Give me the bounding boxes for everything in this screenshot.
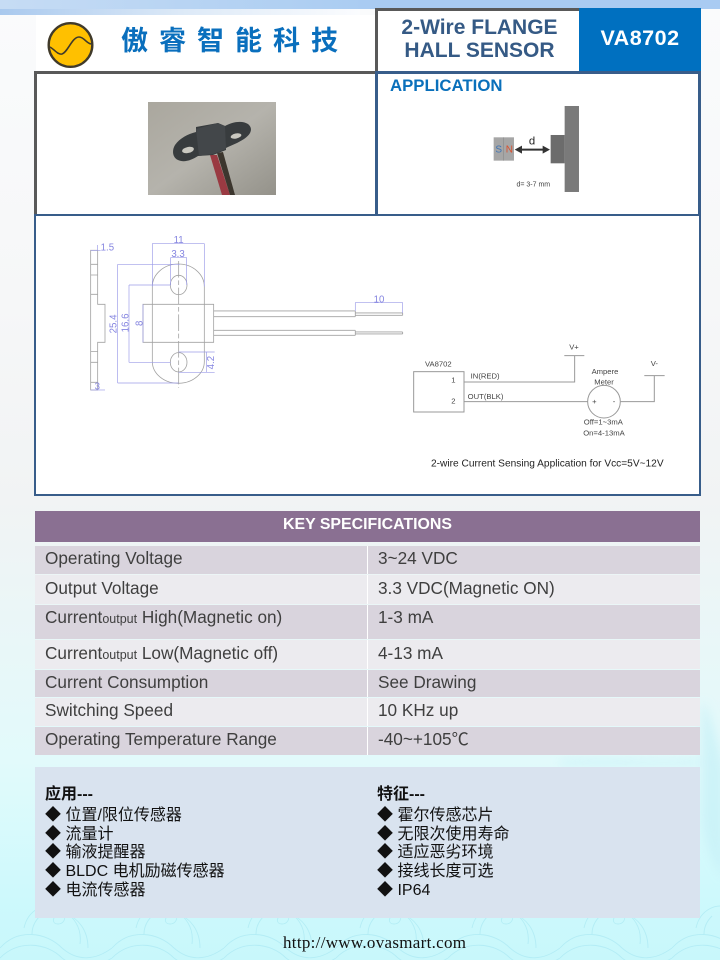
application diagram: magnet and sensor gap (494, 106, 579, 192)
mechanical dimension drawing: 16.6 (121, 314, 132, 332)
applications list: ◆ 电流传感器 (45, 882, 145, 899)
row: current high: 1-3 mA (378, 607, 433, 627)
features list: ◆ 适应恶劣环境 (377, 844, 493, 861)
row: switching speed: 10 KHz up (378, 700, 458, 720)
row: temperature range (35, 727, 700, 755)
specifications table (35, 511, 700, 755)
model number box (579, 8, 701, 72)
circuit diagram: 2-wire Current Sensing Application for Vcc=5V~12V (431, 459, 664, 470)
white content area behind the header and panels (36, 15, 700, 495)
circuit diagram: VA8702 (425, 359, 452, 368)
row: temperature range: -40~+105℃ (378, 729, 469, 749)
application diagram: magnet and sensor gap: d= 3-7 mm (517, 181, 550, 188)
applications list: ◆ 位置/限位传感器 (45, 807, 182, 824)
circuit diagram: Ampere (592, 367, 618, 376)
mechanical dimension drawing: 10 (374, 294, 384, 305)
table header: KEY SPECIFICATIONS (283, 516, 452, 533)
row: temperature range: Operating Temperature Range (45, 729, 277, 749)
website footer: http://www.ovasmart.com (283, 933, 466, 952)
model number box: VA8702 (600, 26, 680, 50)
circuit diagram: Meter (594, 377, 614, 386)
row: current low: 4-13 mA (378, 643, 443, 663)
product title box: HALL SENSOR (404, 39, 555, 62)
circuit diagram: Off=1~3mA (584, 417, 624, 426)
mechanical dimension drawing: 25.4 (109, 314, 120, 333)
row: output voltage: Output Voltage (45, 578, 159, 598)
application diagram: magnet and sensor gap: N (506, 145, 513, 156)
mechanical dimension drawing: 11 (174, 235, 184, 246)
product title box: 2-Wire FLANGE (401, 16, 558, 39)
mechanical dimension drawing: 1.5 (101, 242, 114, 253)
row: output voltage: 3.3 VDC(Magnetic ON) (378, 578, 555, 598)
mechanical dimension drawing: 3 (95, 381, 100, 392)
circuit diagram: V+ (569, 343, 579, 352)
row: current consumption: Current Consumption (45, 672, 208, 692)
row: operating voltage (35, 546, 700, 574)
row: output voltage (35, 575, 700, 604)
features list: 特征--- (377, 786, 425, 803)
applications list: ◆ 输液提醒器 (45, 844, 145, 861)
circuit diagram: V- (651, 359, 658, 368)
features list: ◆ 接线长度可选 (377, 863, 493, 880)
panel: mechanical drawing and circuit (34, 214, 701, 496)
applications list: ◆ 流量计 (45, 826, 113, 843)
panel: application (375, 71, 701, 216)
panel: product photo (34, 71, 376, 216)
application diagram: magnet and sensor gap: S (495, 145, 502, 156)
circuit diagram: OUT(BLK) (468, 392, 504, 401)
row: switching speed: Switching Speed (45, 700, 173, 720)
features list: ◆ 霍尔传感芯片 (377, 807, 493, 824)
features list: ◆ IP64 (377, 882, 430, 899)
circuit diagram: IN(RED) (471, 372, 500, 381)
mechanical dimension drawing: 8 (134, 321, 145, 326)
features list: ◆ 无限次使用寿命 (377, 826, 509, 843)
mechanical dimension drawing (90, 235, 404, 392)
table header (35, 511, 700, 542)
circuit diagram: - (613, 397, 616, 406)
circuit diagram: 1 (451, 375, 455, 384)
row: current consumption (35, 670, 700, 697)
row: current low: Currentoutput Low(Magnetic off) (45, 643, 278, 663)
applications list: 应用--- (45, 786, 93, 803)
application heading: APPLICATION (390, 76, 502, 95)
mechanical dimension drawing: 4.2 (206, 356, 217, 369)
product title box (375, 8, 581, 73)
row: current consumption: See Drawing (378, 672, 476, 692)
circuit diagram: 2 (451, 397, 455, 406)
circuit diagram: On=4-13mA (583, 428, 626, 437)
mechanical dimension drawing: 3.3 (171, 249, 185, 260)
panel: applications and features (35, 767, 700, 918)
circuit diagram (413, 343, 665, 470)
company name: 傲睿智能科技 (121, 26, 349, 56)
features list (377, 785, 509, 899)
logo icon: sine wave in yellow circle (48, 22, 94, 68)
photo: sensor on wood surface (148, 102, 276, 195)
row: operating voltage: 3~24 VDC (378, 548, 458, 568)
row: current low (35, 640, 700, 669)
application diagram: magnet and sensor gap: d (529, 135, 535, 147)
applications list: ◆ BLDC 电机励磁传感器 (45, 863, 225, 880)
row: current high (35, 605, 700, 639)
applications list (45, 785, 225, 899)
circuit diagram: + (592, 397, 597, 406)
row: operating voltage: Operating Voltage (45, 548, 183, 568)
row: current high: Currentoutput High(Magnetic on) (45, 607, 282, 627)
row: switching speed (35, 698, 700, 726)
